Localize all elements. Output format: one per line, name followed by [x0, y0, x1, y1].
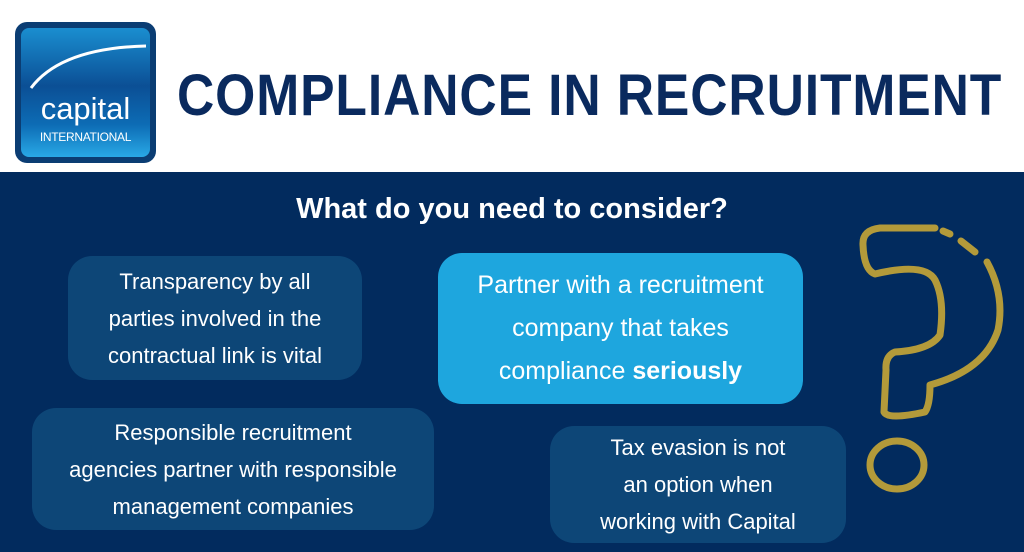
box: responsible [32, 408, 434, 530]
box: responsible: management companies [113, 494, 353, 518]
box: partner: compliance seriously [499, 357, 742, 385]
box: responsible: Responsible recruitment [114, 420, 352, 444]
box: partner: Partner with a recruitment [477, 271, 764, 299]
box: tax evasion: Tax evasion is not [611, 435, 785, 460]
box: transparency [68, 256, 362, 380]
panel: navy band [0, 172, 1024, 552]
box: transparency: contractual link is vital [108, 342, 322, 368]
box: responsible: agencies partner with responsible [69, 456, 397, 482]
box: transparency: Transparency by all [119, 268, 311, 294]
box: tax evasion: an option when [623, 472, 773, 497]
logo [15, 22, 156, 163]
box: tax evasion: working with Capital [600, 509, 796, 534]
title: COMPLIANCE IN RECRUITMENT [177, 63, 1002, 128]
box: tax evasion [550, 426, 846, 543]
box: partner: company that takes [512, 314, 729, 342]
subtitle: What do you need to consider? [296, 193, 728, 225]
logo: INTERNATIONAL [40, 130, 131, 144]
box: transparency: parties involved in the [109, 306, 321, 330]
box: partner [438, 253, 803, 404]
logo: capital [41, 91, 130, 126]
